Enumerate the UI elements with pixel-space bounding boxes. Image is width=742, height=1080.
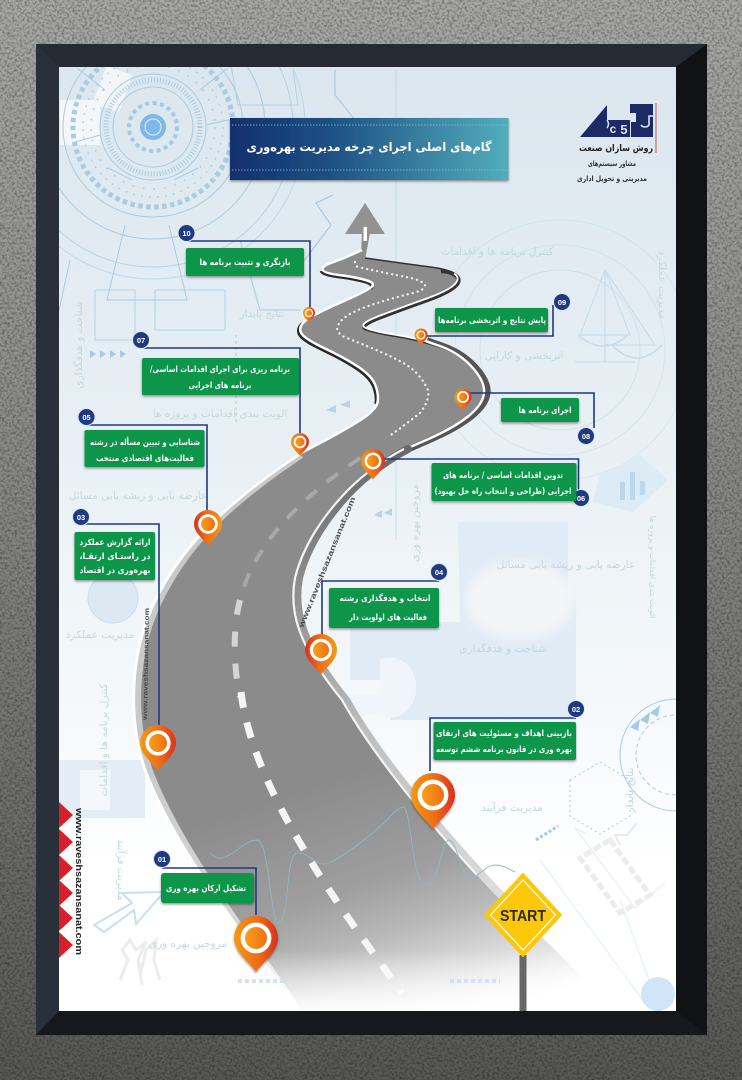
step 01 [154,850,278,972]
background white patches [60,66,133,145]
step 09: 09 [558,298,566,307]
step 03 [72,508,176,771]
step 05 [78,408,222,546]
background technical drawing: top-left dial [1,0,396,540]
step 07: برنامه های اجرایی [188,381,252,391]
step 01: تشکیل ارکان بهره وری [166,884,246,894]
company logo: 5 [620,122,628,137]
faint background labels: الویت بندی اقدامات و پروژه ها [648,516,657,618]
step 10: 10 [182,229,191,238]
step 04: 04 [435,568,444,577]
faint background labels: کنترل برنامه ها و اقدامات [98,683,110,797]
step 02: بازبینی اهداف و مسئولیت های ارتقای [436,729,572,739]
faint background labels: الویت بندی اقدامات و پروژه ها [153,408,287,420]
step 09 [414,294,570,345]
winding road: www.raveshsazansanat.com [142,608,151,721]
title banner: گام‌های اصلی اجرای چرخه مدیریت بهره‌وری [246,140,492,155]
step 02: 02 [572,705,580,714]
step 06 [361,449,590,506]
centre dashed line bottom [241,692,402,993]
step 08: 08 [582,432,590,441]
faint background labels: نتایج پایدار [239,308,284,320]
step 02 [411,700,584,829]
step 06: اجرایی (طراحی و انتخاب راه حل بهبود) [434,487,572,497]
start sign: START [500,908,546,925]
company logo: روش سازان صنعت [579,143,653,154]
background drawing: right side arcs and scales [326,220,676,842]
upper right dark border [365,258,454,274]
faint background labels: عارضه یابی و ریشه یابی مسائل [497,559,635,571]
faint background labels: عارضه یابی و ریشه یابی مسائل [69,490,207,502]
step 06: 06 [577,494,585,503]
faint background labels [66,246,668,950]
title banner [230,118,508,180]
step 04 [305,564,448,675]
faint background labels: اثربخشی و کارایی [484,350,564,362]
road surface [134,250,590,1010]
step 03: ارائه گزارش عملکرد [80,537,151,548]
step 08 [454,388,594,444]
step 10 [178,224,315,322]
faint background labels: مروجین بهره وری [149,938,227,950]
faint background labels: مروجین بهره وری [409,484,421,562]
step 03: 03 [77,513,85,522]
company logo: c [610,122,617,136]
step 06: تدوین اقدامات اساسی / برنامه های [443,471,563,481]
step 09: پایش نتایج و اثربخشی برنامه‌ها [438,316,546,326]
step 07: 07 [137,336,145,345]
step 01: 01 [158,855,166,864]
bottom dotted rows [238,979,500,983]
centre dotted line top [337,262,428,437]
winding road: www.raveshsazansanat.com [315,397,376,447]
faint background labels: مدیریت فرآیند [481,801,543,814]
faint background labels: نتایج پایدار [624,768,636,813]
red triangles with website: www.raveshsazansanat.com [74,807,84,955]
lower left shoulder [138,455,301,1010]
step 04: انتخاب و هدفگذاری رشته [340,593,431,604]
poster [59,67,676,1011]
step 02: بهره وری در قانون برنامه ششم توسعه [436,745,572,755]
step 03: بهره‌وری در اقتصاد [80,566,150,576]
company logo [577,103,656,183]
step 07 [132,332,309,456]
start sign [485,874,561,1011]
step 10: بازنگری و تثبیت برنامه ها [200,257,290,268]
faint background labels: مدیریت عملکرد [656,251,668,319]
step 08: اجرای برنامه ها [518,406,572,416]
centre dashed line middle [235,600,240,697]
red triangles with website [59,802,84,958]
step 05: 05 [82,413,91,422]
bottom fade overlay [268,957,625,1010]
upper left white border [300,250,378,453]
winding road [134,250,625,1011]
step 07: برنامه ریزی برای اجرای اقدامات اساسی/ [150,365,290,375]
centre dashed line fading [243,458,360,590]
company logo: مشاور سیستم‌های [588,159,636,168]
faint background labels: مدیریت عملکرد [66,629,134,641]
upper left black border [322,271,372,288]
faint background labels: شناخت و هدفگذاری [72,301,85,389]
step 04: فعالیت های اولویت دار [348,613,427,623]
faint background labels: کنترل برنامه ها و اقدامات [440,246,554,258]
mid and lower right shoulder [296,445,504,898]
step 05: فعالیت‌های اقتصادی منتخب [96,454,194,464]
background bar chart and climbers at lower left and right [94,823,675,1011]
step 05: شناسایی و تبیین مسأله در رشته [90,436,200,448]
road arrow tip [345,203,385,260]
faint background labels: شناخت و هدفگذاری [459,642,547,655]
background puzzle shapes [59,522,576,818]
wavy line [210,807,515,923]
company logo: مدیریتی و تحویل اداری [577,174,647,183]
step 03: در راستـای ارتقـا، [80,552,151,562]
road watermarks: www.raveshsazansanat.com [296,495,357,630]
faint background labels: مدیریت فرآیند [115,839,128,901]
